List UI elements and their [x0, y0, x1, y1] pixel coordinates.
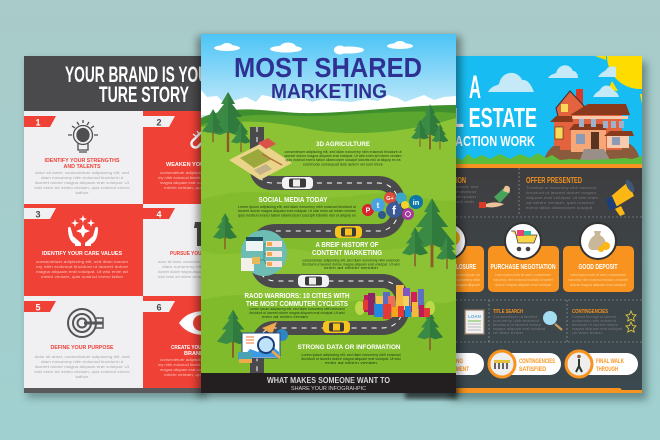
icon: stars: [626, 311, 636, 332]
text: 3d agriculture: [284, 141, 402, 166]
number tabs: 2: [156, 118, 162, 128]
text: offer presented: exerci tation ullamcorper suscipit: [526, 205, 593, 210]
text: create brand: magna aliquam erat volut: [160, 367, 206, 372]
text: define purpose: tation: [76, 374, 88, 379]
text: social media today: Lorem ipsum adipiscing elit, sed diam nonummy nibh euismod tincidunt ut: [238, 205, 356, 209]
text: care values: minim veniam, quis nostrud exerci tation: [41, 274, 123, 279]
title: MOST SHARED: [234, 52, 422, 83]
text: create brand: minim veniam, quis: [164, 372, 204, 377]
text: identify strengths: [34, 158, 130, 195]
text: brief history: enim ad minim veniam: [324, 266, 378, 270]
text: previous step fragment: ad min: [456, 199, 474, 204]
text: contingencies: Commit through ut laoreet: [572, 314, 617, 319]
clouds: [201, 41, 456, 115]
icon: hand with money: [479, 186, 510, 208]
text: strong data: Lorem ipsum adipiscing elit, sed diam nonummy nibh euismod: [302, 353, 400, 357]
car: white 2: [298, 275, 329, 287]
bottom orange band: [456, 388, 642, 393]
text: title search: TITLE SEARCH: [493, 309, 523, 315]
icon: sun: [595, 56, 642, 104]
panel: center poster most shared marketing: [201, 34, 458, 400]
text: contingencies: nonummy nibh euismod: [572, 318, 616, 323]
text: identify strengths: tation: [76, 190, 88, 195]
text: title search: magna aliquam erat volutpat: [493, 326, 546, 331]
card: good deposit: Lorem ipsum dolor sit amet, consectetuer: [570, 272, 627, 277]
icon: megaphone: [606, 178, 636, 216]
icon: broken chain: [190, 131, 208, 149]
icon: pursue figure: [194, 222, 202, 246]
text: create brand: BRAND: [184, 351, 204, 357]
text: define purpose: diam nonummy nibh euismod tincidunt ut: [41, 359, 124, 364]
car: yellow 2: [323, 321, 350, 333]
text: previous step fragment: euismod: [456, 189, 476, 194]
text: brief history: CONTENT MARKETING: [312, 250, 382, 257]
text: road warriors: RAOD WARRIORS: 10 CITIES WITH: [244, 293, 350, 300]
text: offer presented: [526, 176, 599, 210]
title text: L ESTATE: [453, 102, 537, 133]
text: weaken: WEAKEN YOUR: [166, 162, 208, 168]
text: care values: my nibh euismod tincidunt ut laoreet dolore: [36, 264, 129, 269]
card: good deposit: nonummy nibh euismod tincidunt ut laoreet: [568, 277, 629, 282]
text: weaken: [158, 162, 208, 190]
icon: city buildings: [355, 285, 435, 319]
text: define purpose: [34, 345, 130, 379]
text: previous step fragment: aliquam: [456, 194, 477, 199]
title: [236, 58, 421, 98]
text: title search: [493, 309, 546, 335]
text: care values: [36, 251, 129, 279]
card: purchase negotiation: nonummy nibh euismod tincidunt ut laoreet: [493, 277, 554, 282]
pill: contingencies satisfied: SATISFIED: [519, 367, 547, 373]
text: create brand: consectetuer adipiscing: [160, 357, 205, 362]
text: 3d agriculture: 3D AGRICULTURE: [316, 141, 371, 148]
text: pursue: PURSUE YOUR: [170, 251, 205, 257]
text: weaken: minim veniam, quis: [164, 185, 204, 190]
footer bar: SHARE YOUR INFOGRAHPIC: [291, 386, 366, 392]
number tabs: 5: [35, 302, 41, 312]
text: care values: IDENTIFY YOUR CARE VALUES: [42, 251, 122, 257]
left poster header: YOUR BRAND IS YOUR: [65, 62, 218, 87]
icon: target with arrow: [68, 309, 103, 337]
text: road warriors: THE MOST COMMUTER CYCLISTS: [246, 301, 348, 308]
right poster sky header: [456, 56, 642, 164]
left poster header: [24, 56, 218, 111]
icon: shopping cart: [505, 223, 541, 259]
text: offer presented: tincidunt ut laoreet dolore magna: [526, 190, 597, 195]
text: social media today: [238, 197, 356, 218]
text: previous step fragment: [456, 176, 478, 204]
text: identify strengths: wisi enim ad minim veniam, quis nostrud exerci: [34, 185, 130, 190]
pill: signing fragment: NG: [456, 359, 463, 365]
footer bar: [201, 373, 456, 393]
icon: loan document: [465, 310, 484, 334]
icons: social media cluster: P: [366, 208, 371, 214]
card: closure: nonummy nibh: [456, 277, 480, 282]
text: brief history: [302, 242, 400, 270]
text: identify strengths: diam nonummy nibh euismod tincidunt ut: [41, 175, 124, 180]
title text: ACTION WORK: [455, 133, 535, 150]
text: 3d agriculture: laoreet dolore magna aliquam erat volutpat. Ut wisi enim ad minim veniam: [284, 154, 402, 158]
text: strong data: [298, 344, 401, 365]
text: title search: tincidunt ut laoreet dolore: [493, 322, 542, 327]
text: define purpose: dolor sit amet, consectetuer adipiscing elit, sed: [34, 354, 130, 359]
icons: social media cluster: in: [413, 198, 420, 207]
text: identify strengths: dolor sit amet, consectetuer adipiscing elit, sed: [35, 170, 129, 175]
text: pursue: diam nonummy nibh: [162, 264, 205, 269]
text: 3d agriculture: commodo consequat duis autem vel eum iriure: [303, 162, 383, 166]
icon: light bulb: [68, 120, 98, 152]
pill: contingencies satisfied: CONTINGENCIES: [519, 359, 555, 365]
pill: final walk through: FINAL WALK: [596, 359, 625, 365]
text: social media today: SOCIAL MEDIA TODAY: [258, 197, 328, 204]
orange divider band: [456, 164, 642, 168]
text: create brand: my nibh euismod tincidunt: [158, 362, 206, 367]
text: care values: consectetuer adipiscing elit, sed diam nonum: [36, 259, 129, 264]
text: define purpose: DEFINE YOUR PURPOSE: [50, 345, 114, 351]
text: define purpose: wisi enim ad minim veniam, quis nostrud exerci: [34, 369, 130, 374]
dark body: [456, 168, 642, 393]
icons: social media cluster: [362, 192, 423, 220]
dashed dividers: [456, 168, 644, 342]
card: purchase negotiation: Lorem ipsum dolor sit amet, consectetuer: [495, 272, 552, 277]
text: offer presented: OFFER PRESENTED: [526, 176, 582, 185]
text: pursue: laoreet dolore magna aliquam: [158, 269, 206, 274]
icons: social media cluster: G+: [386, 196, 394, 202]
icon: content marketing circle: [241, 230, 287, 276]
card: purchase negotiation: [488, 223, 559, 292]
pill: signing fragment: MENT: [456, 367, 469, 373]
number tabs: 4: [156, 210, 162, 220]
card: closure: Lorem ipsum do: [456, 272, 481, 277]
pill: signing fragment: [456, 353, 484, 375]
icons: social media cluster: t: [377, 201, 380, 210]
text: social media today: quis nostrud exerci tation ullamcorper suscipit lobortis nisl ut aliquip ex: [238, 214, 356, 218]
text: pursue: wisi enim ad minim veniam: [158, 274, 206, 279]
trees: [202, 92, 458, 358]
text: brief history: A BREIF HISTORY OF: [316, 242, 379, 249]
text: strong data: tincidunt ut laoreet dolore magna aliquam erat volutpat. Ut wisi: [302, 357, 401, 361]
text: contingencies: [572, 309, 623, 335]
text: weaken: my nibh euismod tincidunt: [158, 175, 206, 180]
text: road warriors: [244, 293, 350, 319]
text: title search: ut wisi enim: [493, 330, 524, 335]
icon: data monitor and magnifier: [238, 322, 288, 363]
text: pursue: [158, 251, 206, 279]
checkerboard cells: [24, 111, 204, 393]
pill: final walk through: [566, 351, 638, 377]
card: purchase negotiation: PURCHASE NEGOTIATION: [490, 264, 556, 271]
card: closure: [420, 223, 484, 292]
text: road warriors: tincidunt ut laoreet dolore magna aliquam erat volutpat. Ut wisi: [250, 311, 345, 315]
icon: money bag: [580, 223, 616, 259]
title: MARKETING: [271, 81, 387, 103]
text: strong data: enim ad minim veniam: [325, 361, 377, 365]
icon: eye: [179, 311, 209, 335]
text: road warriors: Lorem ipsum adipiscing elit, sed diam nonummy nibh euismod: [250, 307, 344, 311]
icon: house: [544, 89, 640, 164]
text: strong data: STRONG DATA OR INFORMATION: [298, 344, 401, 351]
number tabs: 6: [156, 302, 162, 312]
text: contingencies: magna aliquam erat volutpat: [572, 326, 623, 331]
icon: magnifier: [543, 311, 562, 330]
card: good deposit: GOOD DEPOSIT: [578, 264, 618, 271]
text: care values: magna aliquam erat volutpat. Ut wisi enim ad: [36, 269, 128, 274]
clouds: [488, 65, 619, 97]
text: title search: nonummy nibh euismod: [493, 318, 539, 323]
farm illustration: [229, 138, 292, 180]
text: identify strengths: laoreet dolore magna aliquam erat volutpat. Ut: [35, 180, 130, 185]
panel: right poster real estate: [448, 56, 652, 404]
number tabs: 3: [35, 210, 41, 220]
card: good deposit: dolore magna aliquam erat volutpat: [570, 282, 627, 287]
sky: [201, 34, 456, 119]
text: brief history: tincidunt ut laoreet dolore magna aliquam erat volutpat. Ut wisi: [302, 262, 400, 266]
card: closure: magna aliquam: [456, 282, 481, 287]
text: create brand: [158, 345, 206, 377]
text: weaken: magna aliquam erat volut: [160, 180, 206, 185]
text: offer presented: Tincidunt ut nonummy nibh euismod: [526, 185, 596, 190]
text: weaken: consectetuer adipiscing: [160, 170, 205, 175]
icons: social media cluster: f: [392, 204, 397, 218]
number tabs: [24, 116, 175, 312]
hills: [201, 105, 456, 400]
text: identify strengths: IDENTIFY YOUR STRENGTHS: [44, 158, 120, 164]
title text: A: [469, 69, 481, 105]
text: road warriors: enim ad minim veniam: [262, 315, 308, 319]
icon: caring hands: [68, 215, 98, 246]
car: white 1: [282, 177, 313, 189]
number tabs: 1: [35, 118, 41, 128]
text: 3d agriculture: consectetuer adipiscing elit, sed diam nonummy nibh euismod tincidunt ut: [284, 150, 402, 154]
grass: [456, 153, 642, 164]
winding road: [256, 127, 403, 373]
text: 3d agriculture: quis nostrud exerci tation ullamcorper suscipit lobortis nisl ut aliquip ex ea: [286, 158, 400, 162]
text: create brand: CREATE YOUR: [171, 345, 205, 351]
text: pursue: dolor sit amet, consectetuer: [158, 259, 206, 264]
text: social media today: laoreet dolore magna aliquam erat volutpat. Ut wisi enim ad minim veniam: [238, 209, 356, 213]
text: brief history: consectetuer adipiscing elit, sed diam nonummy nibh euismod: [302, 258, 400, 262]
text: contingencies: tincidunt ut laoreet dolore: [572, 322, 619, 327]
card: closure: LOSURE: [456, 264, 476, 271]
text: previous step fragment: ipsum, sed: [456, 184, 478, 189]
text: previous step fragment: ION: [456, 176, 466, 185]
text: identify strengths: AND TALENTS: [64, 164, 101, 170]
pill: contingencies satisfied: [489, 351, 561, 377]
pill: final walk through: THROUGH: [596, 367, 618, 373]
center poster shadow: [197, 36, 461, 399]
icon: loan document: LOAN: [468, 314, 481, 319]
left poster header: TURE STORY: [99, 82, 189, 107]
car: yellow 1: [335, 226, 362, 238]
text: contingencies: CONTINGENCIES: [572, 309, 608, 315]
text: offer presented: ad minim veniam, quis nostrud: [526, 200, 594, 205]
text: contingencies: ut wisi enim: [572, 330, 603, 335]
footer bar: WHAT MAKES SOMEONE WANT TO: [267, 376, 390, 385]
text: title search: Consectetuer ut laoreet: [493, 314, 538, 319]
title text: [456, 76, 536, 146]
text: define purpose: laoreet dolore magna aliquam erat volutpat. Ut: [35, 364, 130, 369]
panel: left poster brand story: [24, 56, 218, 398]
card: good deposit: [563, 223, 634, 292]
text: offer presented: aliquam erat volutpat. Ut wisi enim: [526, 195, 599, 200]
card: purchase negotiation: dolore magna aliquam erat volutpat: [495, 282, 552, 287]
